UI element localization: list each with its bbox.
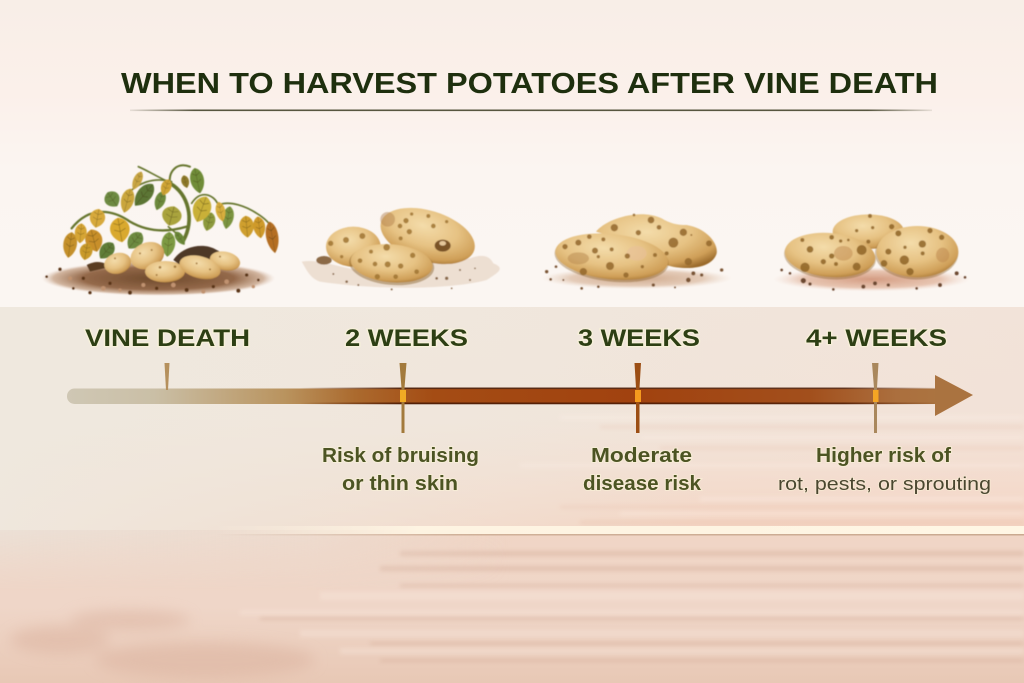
risk note: 4+ weeks: Higher risk of	[816, 445, 951, 467]
dirt patch	[773, 267, 970, 291]
risk note: 2 weeks: Risk of bruising	[322, 445, 479, 467]
stage label: vine death: VINE DEATH	[85, 325, 250, 352]
tick: 3 weeks	[634, 363, 641, 433]
risk note: 3 weeks	[583, 445, 702, 495]
dirt patch	[542, 265, 732, 290]
risk note: 2 weeks	[322, 445, 479, 495]
tubers	[102, 237, 242, 283]
potatoes	[782, 214, 958, 283]
illustration: 3 weeks potatoes	[542, 214, 732, 290]
title rule	[130, 110, 932, 111]
illustration: vine death plant	[42, 165, 281, 296]
arrow shaft	[67, 388, 942, 404]
potatoes	[326, 198, 482, 289]
risk note: 4+ weeks: rot, pests, or sprouting	[778, 473, 991, 494]
title: WHEN TO HARVEST POTATOES AFTER VINE DEATH	[121, 68, 938, 100]
leaves	[61, 167, 281, 263]
stage label: 3 weeks: 3 WEEKS	[578, 325, 700, 352]
dirt patch	[302, 256, 500, 290]
background: upper band	[0, 0, 1024, 307]
illustration: 4+ weeks potatoes	[773, 214, 970, 291]
arrow head	[935, 375, 973, 416]
stems	[72, 165, 273, 241]
risk note: 2 weeks: or thin skin	[342, 473, 458, 495]
tick: 2 weeks	[400, 363, 406, 433]
risk note: 3 weeks: disease risk	[583, 473, 702, 495]
illustration: 2 weeks potatoes	[302, 198, 500, 290]
timeline arrow	[67, 363, 973, 433]
background: lower wood band	[0, 530, 1024, 683]
stage label: 4+ weeks: 4+ WEEKS	[806, 325, 947, 352]
soil mound	[42, 246, 275, 296]
tick: vine death	[164, 363, 170, 390]
potatoes	[552, 214, 717, 288]
risk note: 3 weeks: Moderate	[591, 445, 692, 467]
stage label: 2 weeks: 2 WEEKS	[345, 325, 468, 352]
shine line	[215, 526, 1024, 536]
background: timeline band	[0, 307, 1024, 530]
risk note: 4+ weeks	[778, 445, 991, 494]
tick: 4+ weeks	[872, 363, 878, 433]
